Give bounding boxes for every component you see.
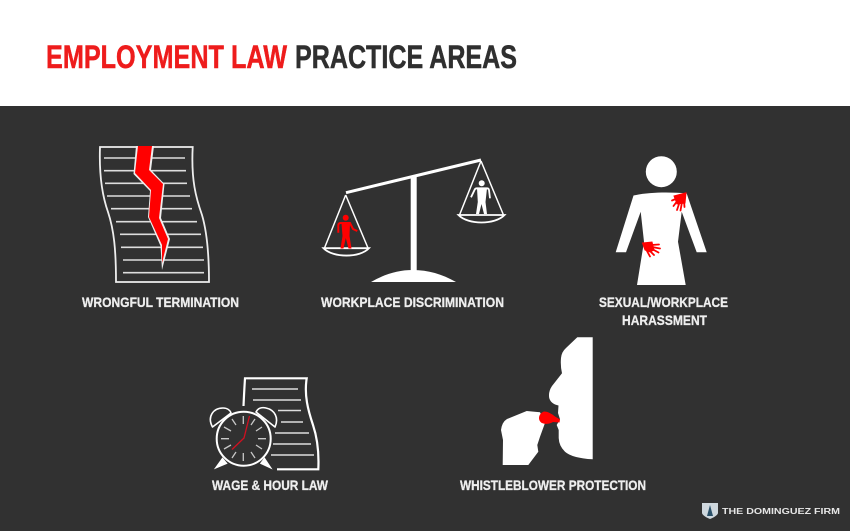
icon: red whistle: [539, 412, 560, 424]
icon: red hand on shoulder: [672, 193, 686, 210]
icon: red hand on waist: [642, 242, 660, 256]
icon: whistleblower: [501, 337, 593, 465]
label: sexual/workplace harassment: [599, 294, 728, 328]
icon: scale: [324, 160, 504, 282]
label: wrongful termination: WRONGFUL TERMINATION: [82, 294, 239, 310]
icon: red figure: [338, 215, 357, 248]
title: [46, 39, 517, 75]
title: EMPLOYMENT LAW: [46, 39, 288, 75]
label: sexual/workplace harassment: HARASSMENT: [622, 312, 707, 328]
icon: clock and timesheet: [210, 378, 318, 469]
label: workplace discrimination: WORKPLACE DISCRIMINATION: [321, 294, 504, 310]
icon: harassment figure: [616, 156, 707, 285]
logo: the dominguez firm: THE DOMINGUEZ FIRM: [722, 507, 840, 516]
logo: the dominguez firm: [702, 503, 840, 519]
label: whistleblower protection: WHISTLEBLOWER PROTECTION: [460, 477, 646, 493]
icon: torn document: [100, 146, 209, 282]
label: wage and hour law: WAGE & HOUR LAW: [212, 477, 329, 493]
label: sexual/workplace harassment: SEXUAL/WORKPLACE: [599, 294, 728, 310]
icon: white figure: [471, 180, 490, 214]
title: PRACTICE AREAS: [295, 39, 517, 75]
